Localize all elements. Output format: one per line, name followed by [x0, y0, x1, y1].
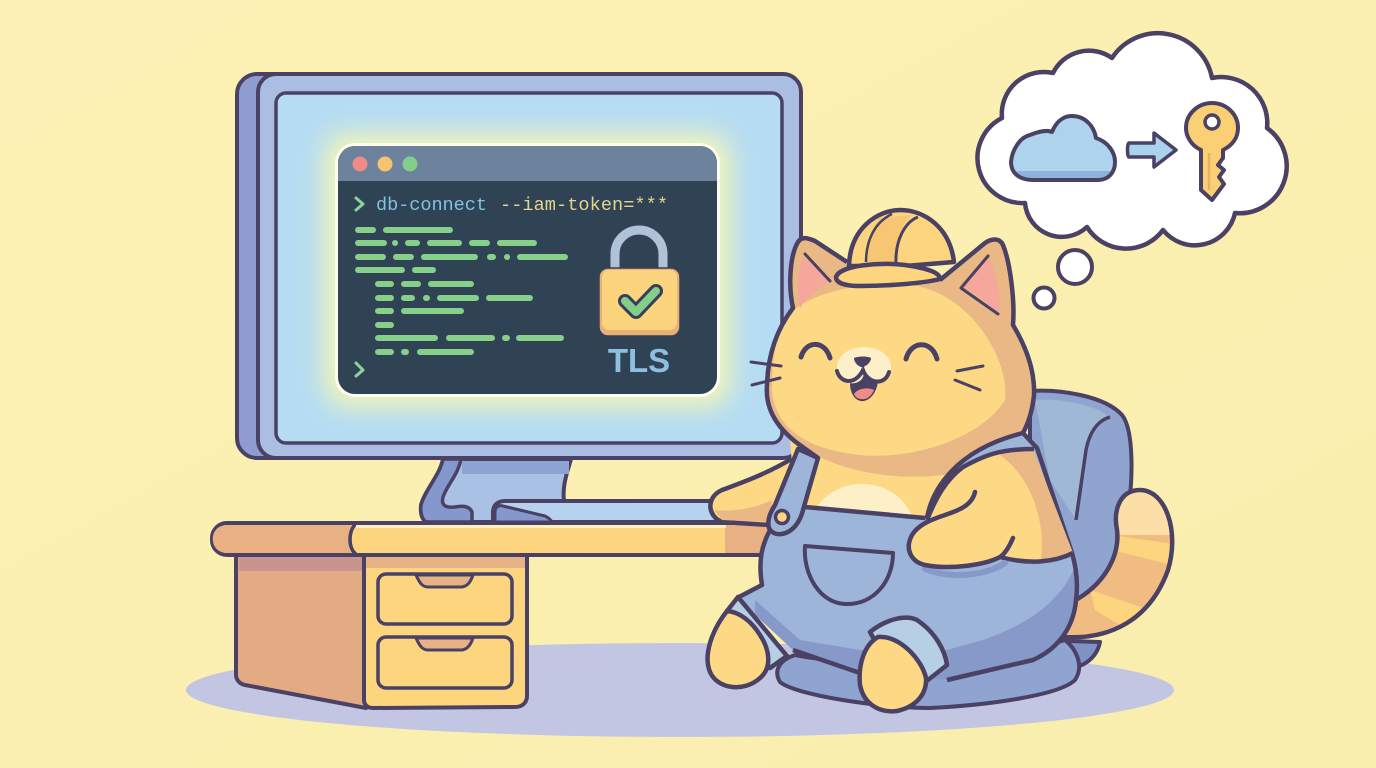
command text: db-connect: [376, 195, 487, 216]
bib pocket: [805, 546, 893, 604]
icon: cloud: [1010, 116, 1117, 182]
right arm: [909, 492, 1013, 567]
illustration: cat at desk connecting to database: [186, 30, 1289, 737]
monitor back shell: [237, 74, 357, 458]
padlock icon: [599, 230, 680, 336]
left strap: [768, 449, 818, 534]
top drawer: [378, 574, 512, 624]
TLS label: TLS: [608, 342, 670, 379]
overalls: [737, 433, 1090, 690]
floor shadow: [186, 643, 1174, 737]
cat torso: [790, 440, 1060, 560]
command text: --iam-token=***: [500, 195, 668, 216]
left ear inner: [798, 256, 830, 308]
chair back: [1030, 391, 1132, 605]
keyboard: [493, 501, 730, 522]
thought bubble: [977, 33, 1287, 308]
prompt chevron: [356, 198, 363, 210]
cat tail: [1063, 485, 1180, 637]
eyes: [801, 344, 937, 359]
muzzle: [837, 347, 891, 387]
mouth: [837, 370, 889, 401]
monitor stand: [421, 459, 571, 522]
strap button: [776, 510, 788, 524]
cushion: [777, 640, 1100, 708]
monitor front bezel: [258, 74, 801, 458]
icon: arrow: [1128, 133, 1176, 167]
right ear inner: [961, 256, 1000, 314]
desk cabinet front: [364, 555, 527, 708]
small thought circles: [1034, 250, 1092, 308]
right leg and foot: [860, 618, 947, 711]
nose: [854, 356, 871, 367]
monitor: [237, 74, 801, 458]
desk: [212, 523, 780, 708]
hard hat: [836, 210, 954, 286]
icon: key: [1186, 103, 1238, 200]
cat: [708, 210, 1090, 711]
right torso: [908, 449, 1073, 563]
desk cabinet side: [236, 555, 366, 708]
head: [751, 238, 1034, 477]
left arm: [710, 458, 793, 526]
whiskers: [751, 362, 983, 390]
cloud bubble: [977, 33, 1287, 249]
monitor screen: [276, 93, 782, 443]
code output lines: [358, 230, 565, 352]
belly patch: [810, 484, 914, 576]
terminal window: [335, 143, 720, 397]
second prompt chevron: [356, 363, 363, 376]
left leg and foot: [708, 597, 787, 687]
bottom drawer: [378, 637, 512, 688]
shadow under right arm: [925, 563, 1005, 575]
desk top: [212, 523, 780, 555]
window control dots: [352, 156, 418, 172]
